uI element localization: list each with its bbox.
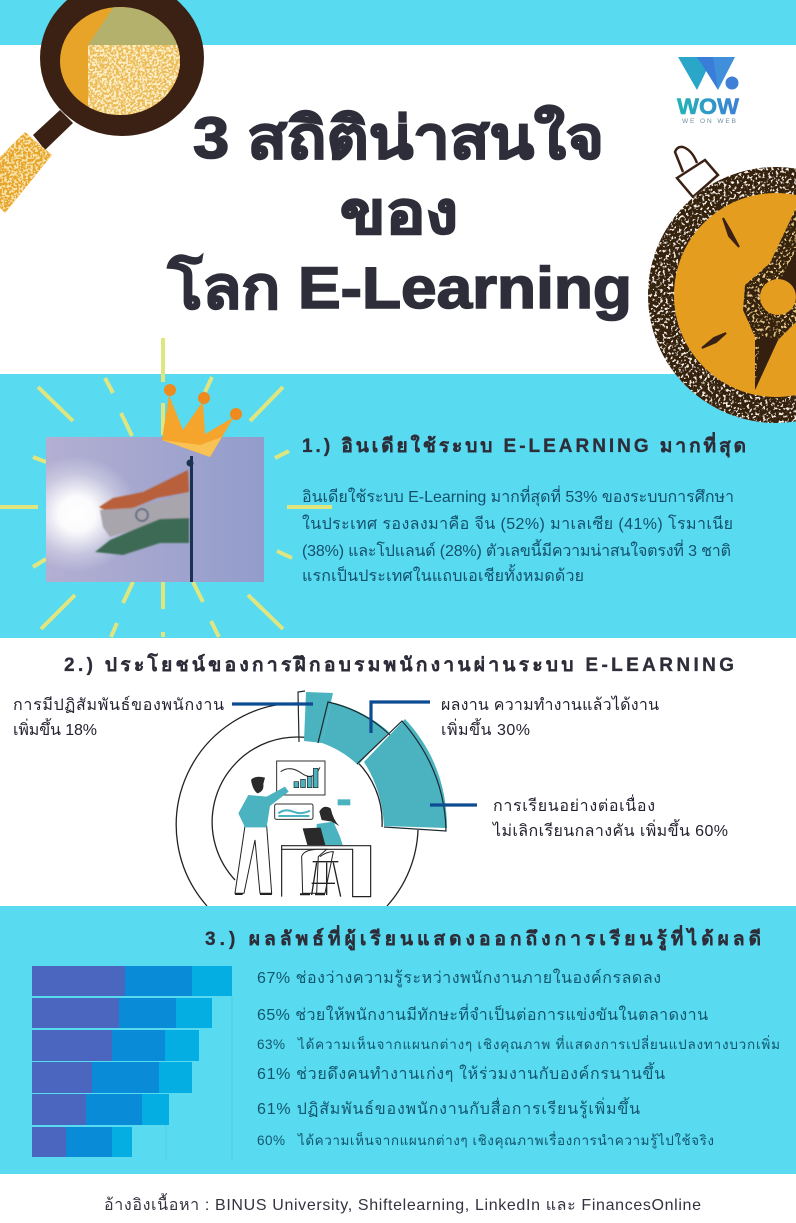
- list: result statistics: 60%: [257, 1133, 285, 1148]
- list: result statistics: 61% ปฏิสัมพันธ์ของพนักงานกับสื่อการเรียนรู้เพิ่มขึ้น: [257, 1097, 640, 1119]
- title: โลก E-Learning: [167, 253, 632, 321]
- callout label: productivity 30%: เพิ่มขึ้น 30%: [441, 718, 530, 739]
- callout: engagement leader line: [232, 702, 313, 706]
- section 2 heading: 2.) ประโยชน์ของการฝึกอบรมพนักงานผ่านระบบ E-LEARNING: [64, 653, 734, 676]
- section 1 body text: ในประเทศ รองลงมาคือ จีน (52%) มาเลเซีย (41%) โรมาเนีย: [302, 514, 733, 533]
- photo: Indian flag: [46, 437, 264, 582]
- chart: stacked bars: [32, 966, 232, 1160]
- icon: compass: [648, 147, 796, 423]
- list: result statistics: 61% ช่วยดึงคนทำงานเก่งๆ ให้ร่วมงานกับองค์กรนานขึ้น: [257, 1062, 665, 1083]
- callout label: engagement 18%: การมีปฏิสัมพันธ์ของพนักงาน: [13, 695, 224, 714]
- callout: retention leader line: [430, 803, 477, 807]
- section 1 body text: อินเดียใช้ระบบ E-Learning มากที่สุดที่ 53% ของระบบการศึกษา: [302, 485, 734, 507]
- illustration: two people at a desk with charts: [235, 761, 371, 897]
- section 1 body text: [302, 485, 734, 585]
- icon: crown: [162, 384, 242, 457]
- logo: WOW we on web: [677, 57, 739, 125]
- wedge: engagement 18%: [304, 692, 333, 743]
- list: result statistics: ได้ความเห็นจากแผนกต่างๆ เชิงคุณภาพ ที่แสดงการเปลี่ยนแปลงทางบวกเพิ่ม: [297, 1035, 780, 1053]
- wedge: retention 60%: [364, 719, 447, 828]
- list: result statistics: ได้ความเห็นจากแผนกต่างๆ เชิงคุณภาพเรื่องการนำความรู้ไปใช้จริง: [297, 1131, 714, 1149]
- wedge: productivity 30%: [322, 702, 389, 765]
- section 1 heading: 1.) อินเดียใช้ระบบ E-LEARNING มากที่สุด: [302, 432, 746, 458]
- callout: productivity leader line: [371, 702, 430, 733]
- panel: section 1 background: [0, 374, 796, 638]
- title: ของ: [340, 181, 458, 246]
- section 3 heading: 3.) ผลลัพธ์ที่ผู้เรียนแสดงออกถึงการเรียนรู้ที่ได้ผลดี: [205, 925, 761, 951]
- panel: section 3 background: [0, 906, 796, 1174]
- footer: sources: อ้างอิงเนื้อหา : BINUS University, Shiftelearning, LinkedIn และ FinancesOnline: [104, 1193, 701, 1214]
- logo: WOW we on web: WOW: [677, 94, 739, 119]
- decorative sun rays around the flag: [0, 338, 332, 637]
- callout label: engagement 18%: [13, 695, 224, 739]
- callout label: retention 60%: ไม่เลิกเรียนกลางคัน เพิ่มขึ้น 60%: [491, 819, 728, 840]
- callout label: productivity 30%: ผลงาน ความทำงานแล้วได้งาน: [441, 695, 659, 714]
- callout label: retention 60%: [491, 794, 728, 840]
- title: 3 สถิติน่าสนใจ: [193, 104, 604, 171]
- section 1 body text: แรกเป็นประเทศในแถบเอเชียทั้งหมดด้วย: [302, 564, 584, 585]
- list: result statistics: 65% ช่วยให้พนักงานมีทักษะที่จำเป็นต่อการแข่งขันในตลาดงาน: [257, 1003, 708, 1024]
- icon: magnifying glass: [0, 0, 204, 213]
- title: [167, 104, 632, 321]
- list: result statistics: [257, 968, 780, 1149]
- callout label: productivity 30%: [441, 695, 659, 739]
- callout label: retention 60%: การเรียนอย่างต่อเนื่อง: [493, 794, 655, 815]
- logo: WOW we on web: WE ON WEB: [682, 118, 736, 125]
- top cyan band: [0, 0, 796, 45]
- list: result statistics: 63%: [257, 1037, 285, 1052]
- section 1 body text: (38%) และโปแลนด์ (28%) ตัวเลขนี้มีความน่าสนใจตรงที่ 3 ชาติ: [302, 539, 731, 560]
- callout label: engagement 18%: เพิ่มขึ้น 18%: [13, 718, 97, 739]
- chart: radial benefit wedges with illustration: [176, 691, 447, 906]
- list: result statistics: 67% ช่องว่างความรู้ระหว่างพนักงานภายในองค์กรลดลง: [257, 968, 661, 988]
